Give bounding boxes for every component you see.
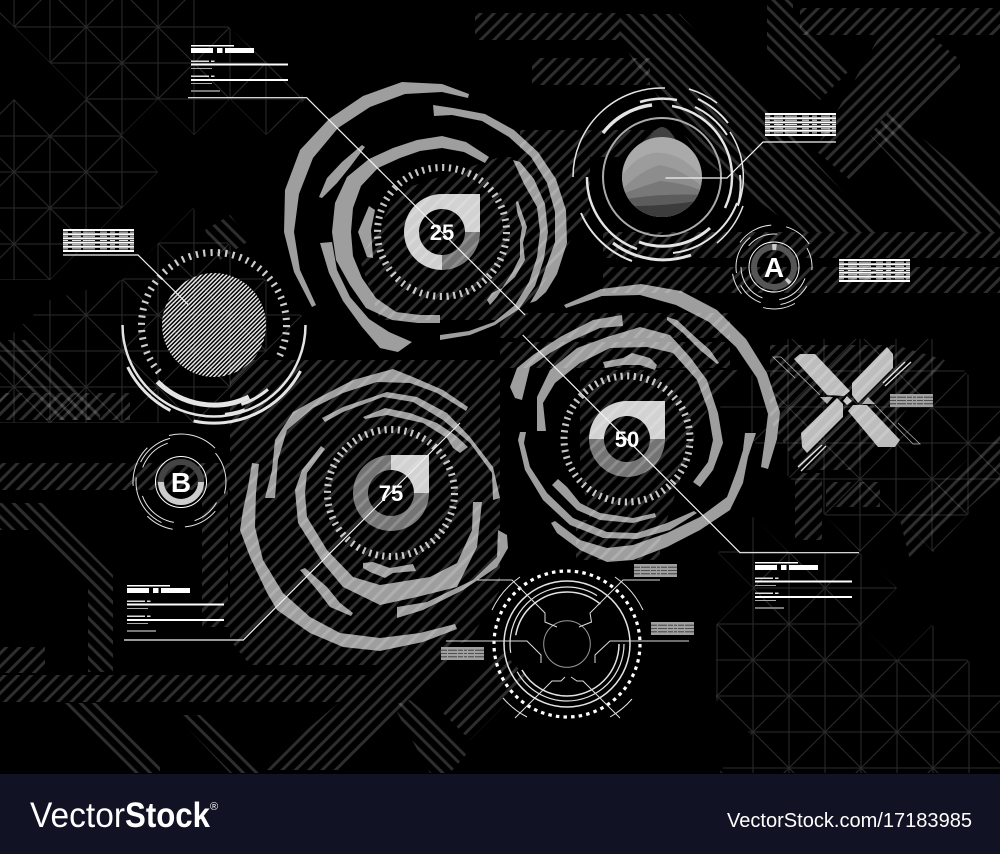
- text block: target left: [441, 647, 484, 660]
- text block: planet gauge: [765, 114, 836, 135]
- footer bar: [0, 774, 1000, 854]
- ring chart 75 arcs: [240, 369, 508, 651]
- badge A: [717, 210, 831, 324]
- number 25: 25: [430, 220, 454, 245]
- ring chart 25 arcs: [284, 82, 567, 352]
- ring chart 25 tick scale: [378, 168, 506, 296]
- number 50: 50: [615, 427, 639, 452]
- leader line and data block: ring 75: [124, 423, 460, 640]
- text block: target upper: [634, 564, 677, 577]
- footer logo: VectorStock: [30, 796, 220, 835]
- ring chart 25 donut: [404, 194, 480, 270]
- badge B: [118, 419, 244, 545]
- target gauge: [446, 571, 689, 718]
- footer logo: ®: [210, 801, 218, 813]
- text block: target right: [651, 622, 694, 635]
- leader line and data block: ring 25: [188, 45, 525, 315]
- number 75: 75: [379, 481, 403, 506]
- text block: badge A: [839, 260, 910, 281]
- ring chart 75 donut: [353, 455, 429, 531]
- hatched gauge: [63, 252, 306, 423]
- badge A: A: [764, 252, 784, 283]
- ring chart 75 tick scale: [328, 430, 454, 556]
- leader line and data block: ring 50: [523, 335, 859, 609]
- text block: hatched gauge: [63, 230, 134, 251]
- planet gauge: [573, 88, 836, 261]
- ring chart 50 donut: [589, 401, 665, 477]
- footer url: VectorStock.com/17183985: [727, 810, 972, 832]
- text block: cross: [890, 394, 933, 407]
- ring chart 50 tick scale: [564, 376, 690, 502]
- icon: X cross: [773, 347, 920, 471]
- ring chart 50 arcs: [510, 284, 780, 562]
- badge B: B: [171, 467, 191, 498]
